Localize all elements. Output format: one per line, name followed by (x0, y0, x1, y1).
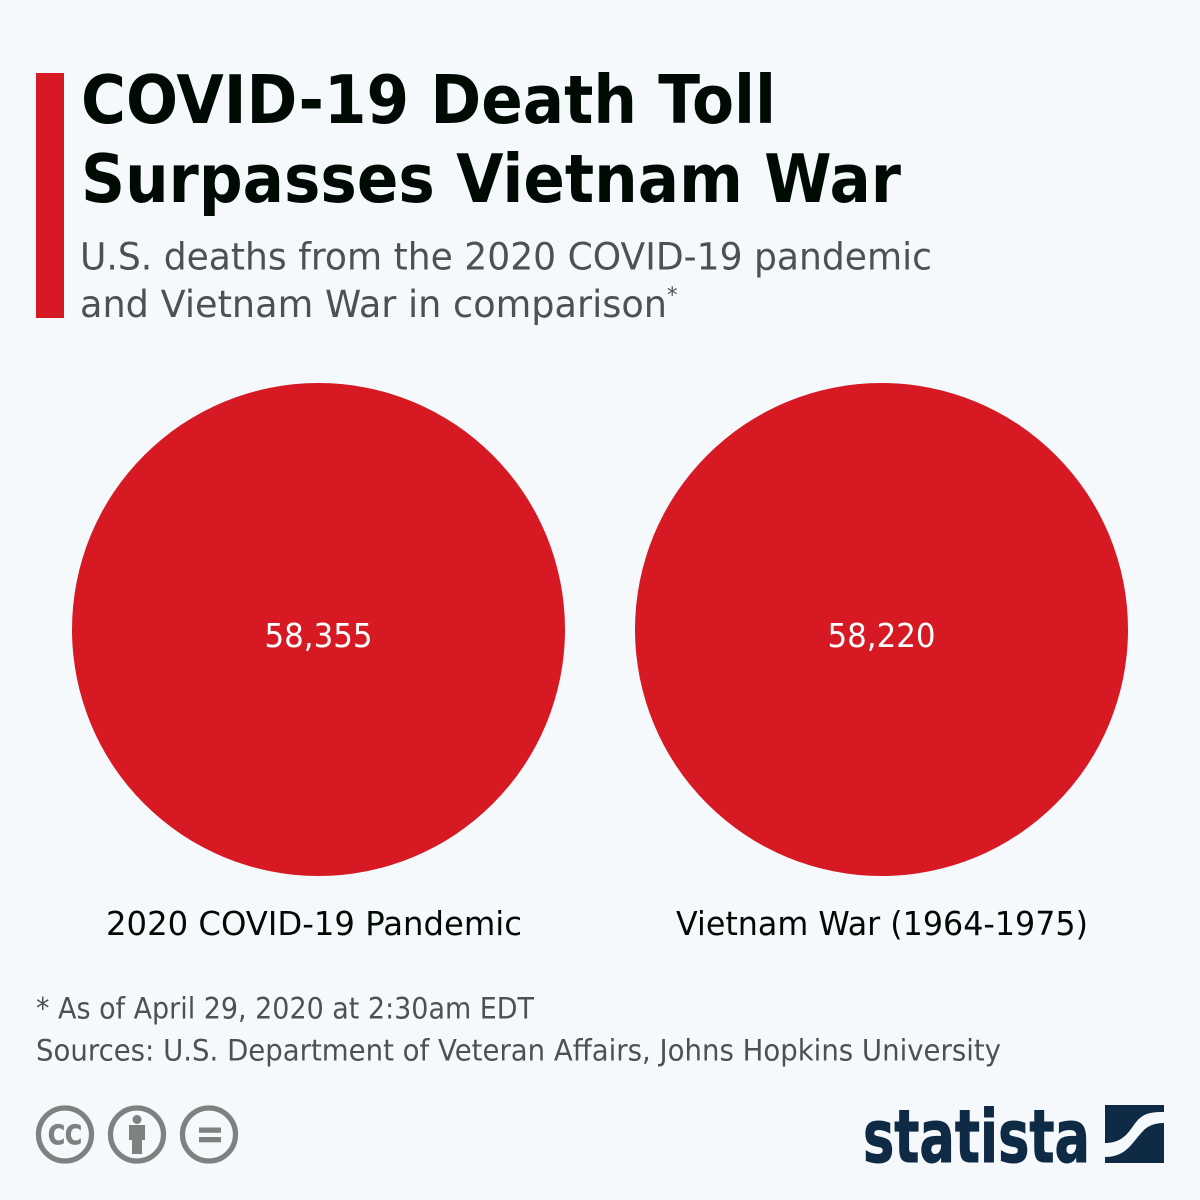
subtitle: * (667, 283, 678, 307)
statista logo (863, 1095, 1164, 1180)
label: 2020 COVID-19 Pandemic: 2020 COVID-19 Pandemic (106, 904, 522, 943)
subtitle: U.S. deaths from the 2020 COVID-19 pandemic (80, 234, 932, 278)
value: 58,220: 58,220 (828, 616, 936, 655)
title: Surpasses Vietnam War (81, 140, 901, 218)
circle: 2020 COVID-19 pandemic (72, 383, 565, 876)
footnote and sources: * As of April 29, 2020 at 2:30am EDT (36, 992, 534, 1026)
title accent bar (36, 73, 64, 318)
title (81, 61, 901, 218)
circle: Vietnam War (635, 383, 1128, 876)
icon: no derivatives (182, 1108, 236, 1161)
title: COVID-19 Death Toll (81, 61, 776, 139)
value: 58,355: 58,355 (264, 616, 372, 655)
icon: creative commons: CC (48, 1120, 82, 1151)
icon: attribution (110, 1108, 164, 1161)
footnote and sources: Sources: U.S. Department of Veteran Affairs, Johns Hopkins University (36, 1034, 1001, 1068)
wordmark: statista (863, 1095, 1090, 1180)
subtitle: and Vietnam War in comparison (80, 282, 667, 326)
subtitle (80, 234, 932, 326)
logo mark (1105, 1105, 1164, 1163)
icon: creative commons (38, 1108, 92, 1161)
label: Vietnam War (1964-1975): Vietnam War (1964-1975) (676, 904, 1088, 943)
footnote and sources (36, 992, 1001, 1068)
